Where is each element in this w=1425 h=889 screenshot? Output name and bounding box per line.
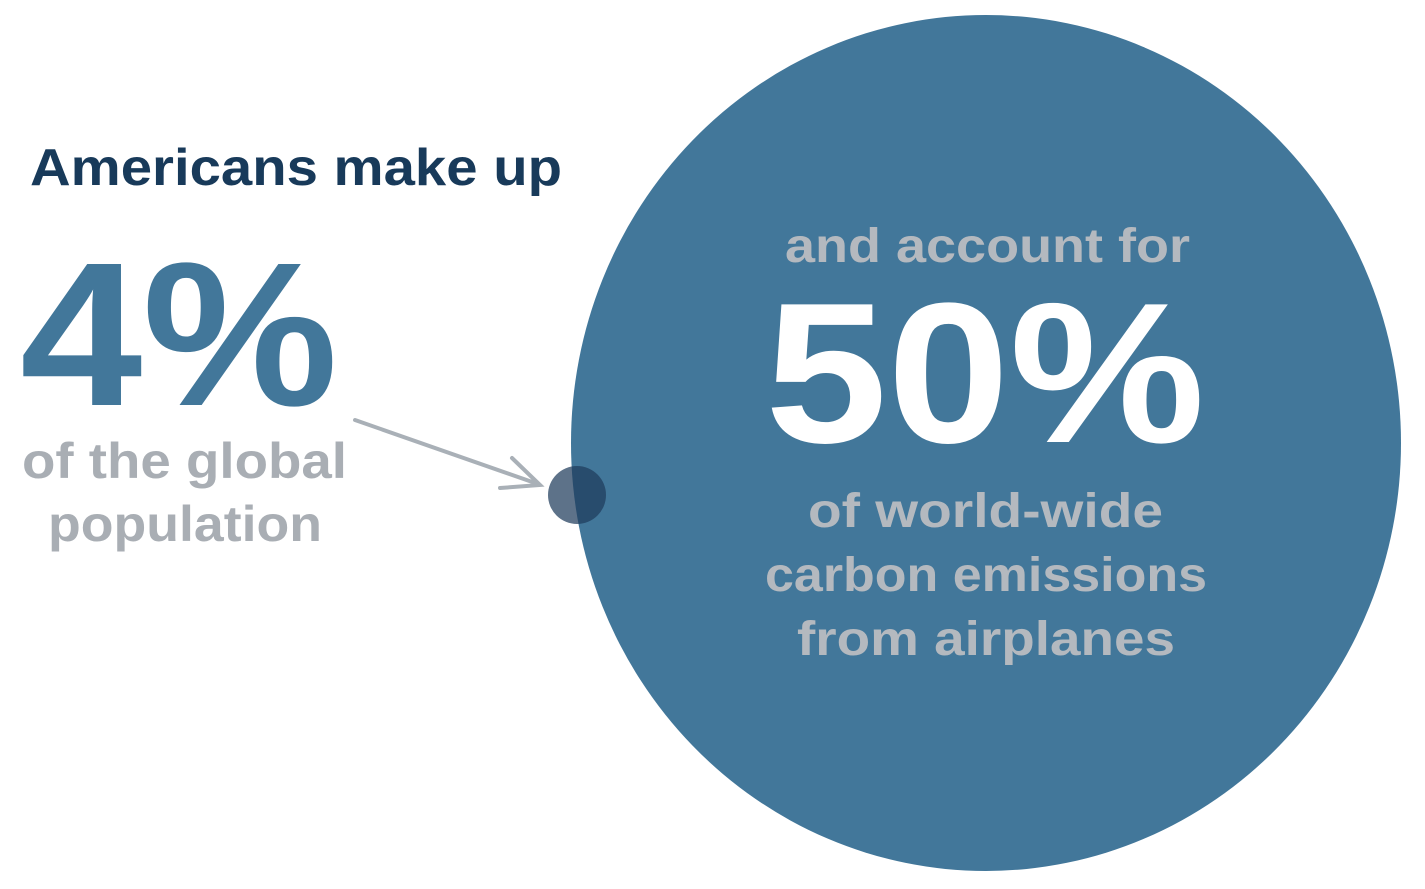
heading: Americans make up: Americans make up	[30, 139, 562, 197]
stat: 50%: 50%	[765, 262, 1205, 485]
text: of the global population	[22, 433, 347, 552]
text: of world-wide carbon emissions from airplanes: from airplanes	[797, 613, 1175, 666]
small circle: americans	[548, 466, 606, 524]
text: of the global population: of the global	[22, 433, 347, 489]
stat: 4%: 4%	[20, 220, 338, 449]
text: of the global population: population	[48, 496, 322, 552]
text: of world-wide carbon emissions from airplanes	[765, 485, 1207, 666]
text: of world-wide carbon emissions from airplanes: carbon emissions	[765, 549, 1207, 602]
big circle: world emissions	[571, 15, 1401, 871]
text: and account for: and account for	[785, 220, 1190, 273]
text: of world-wide carbon emissions from airplanes: of world-wide	[808, 485, 1163, 538]
arrow	[355, 420, 540, 488]
